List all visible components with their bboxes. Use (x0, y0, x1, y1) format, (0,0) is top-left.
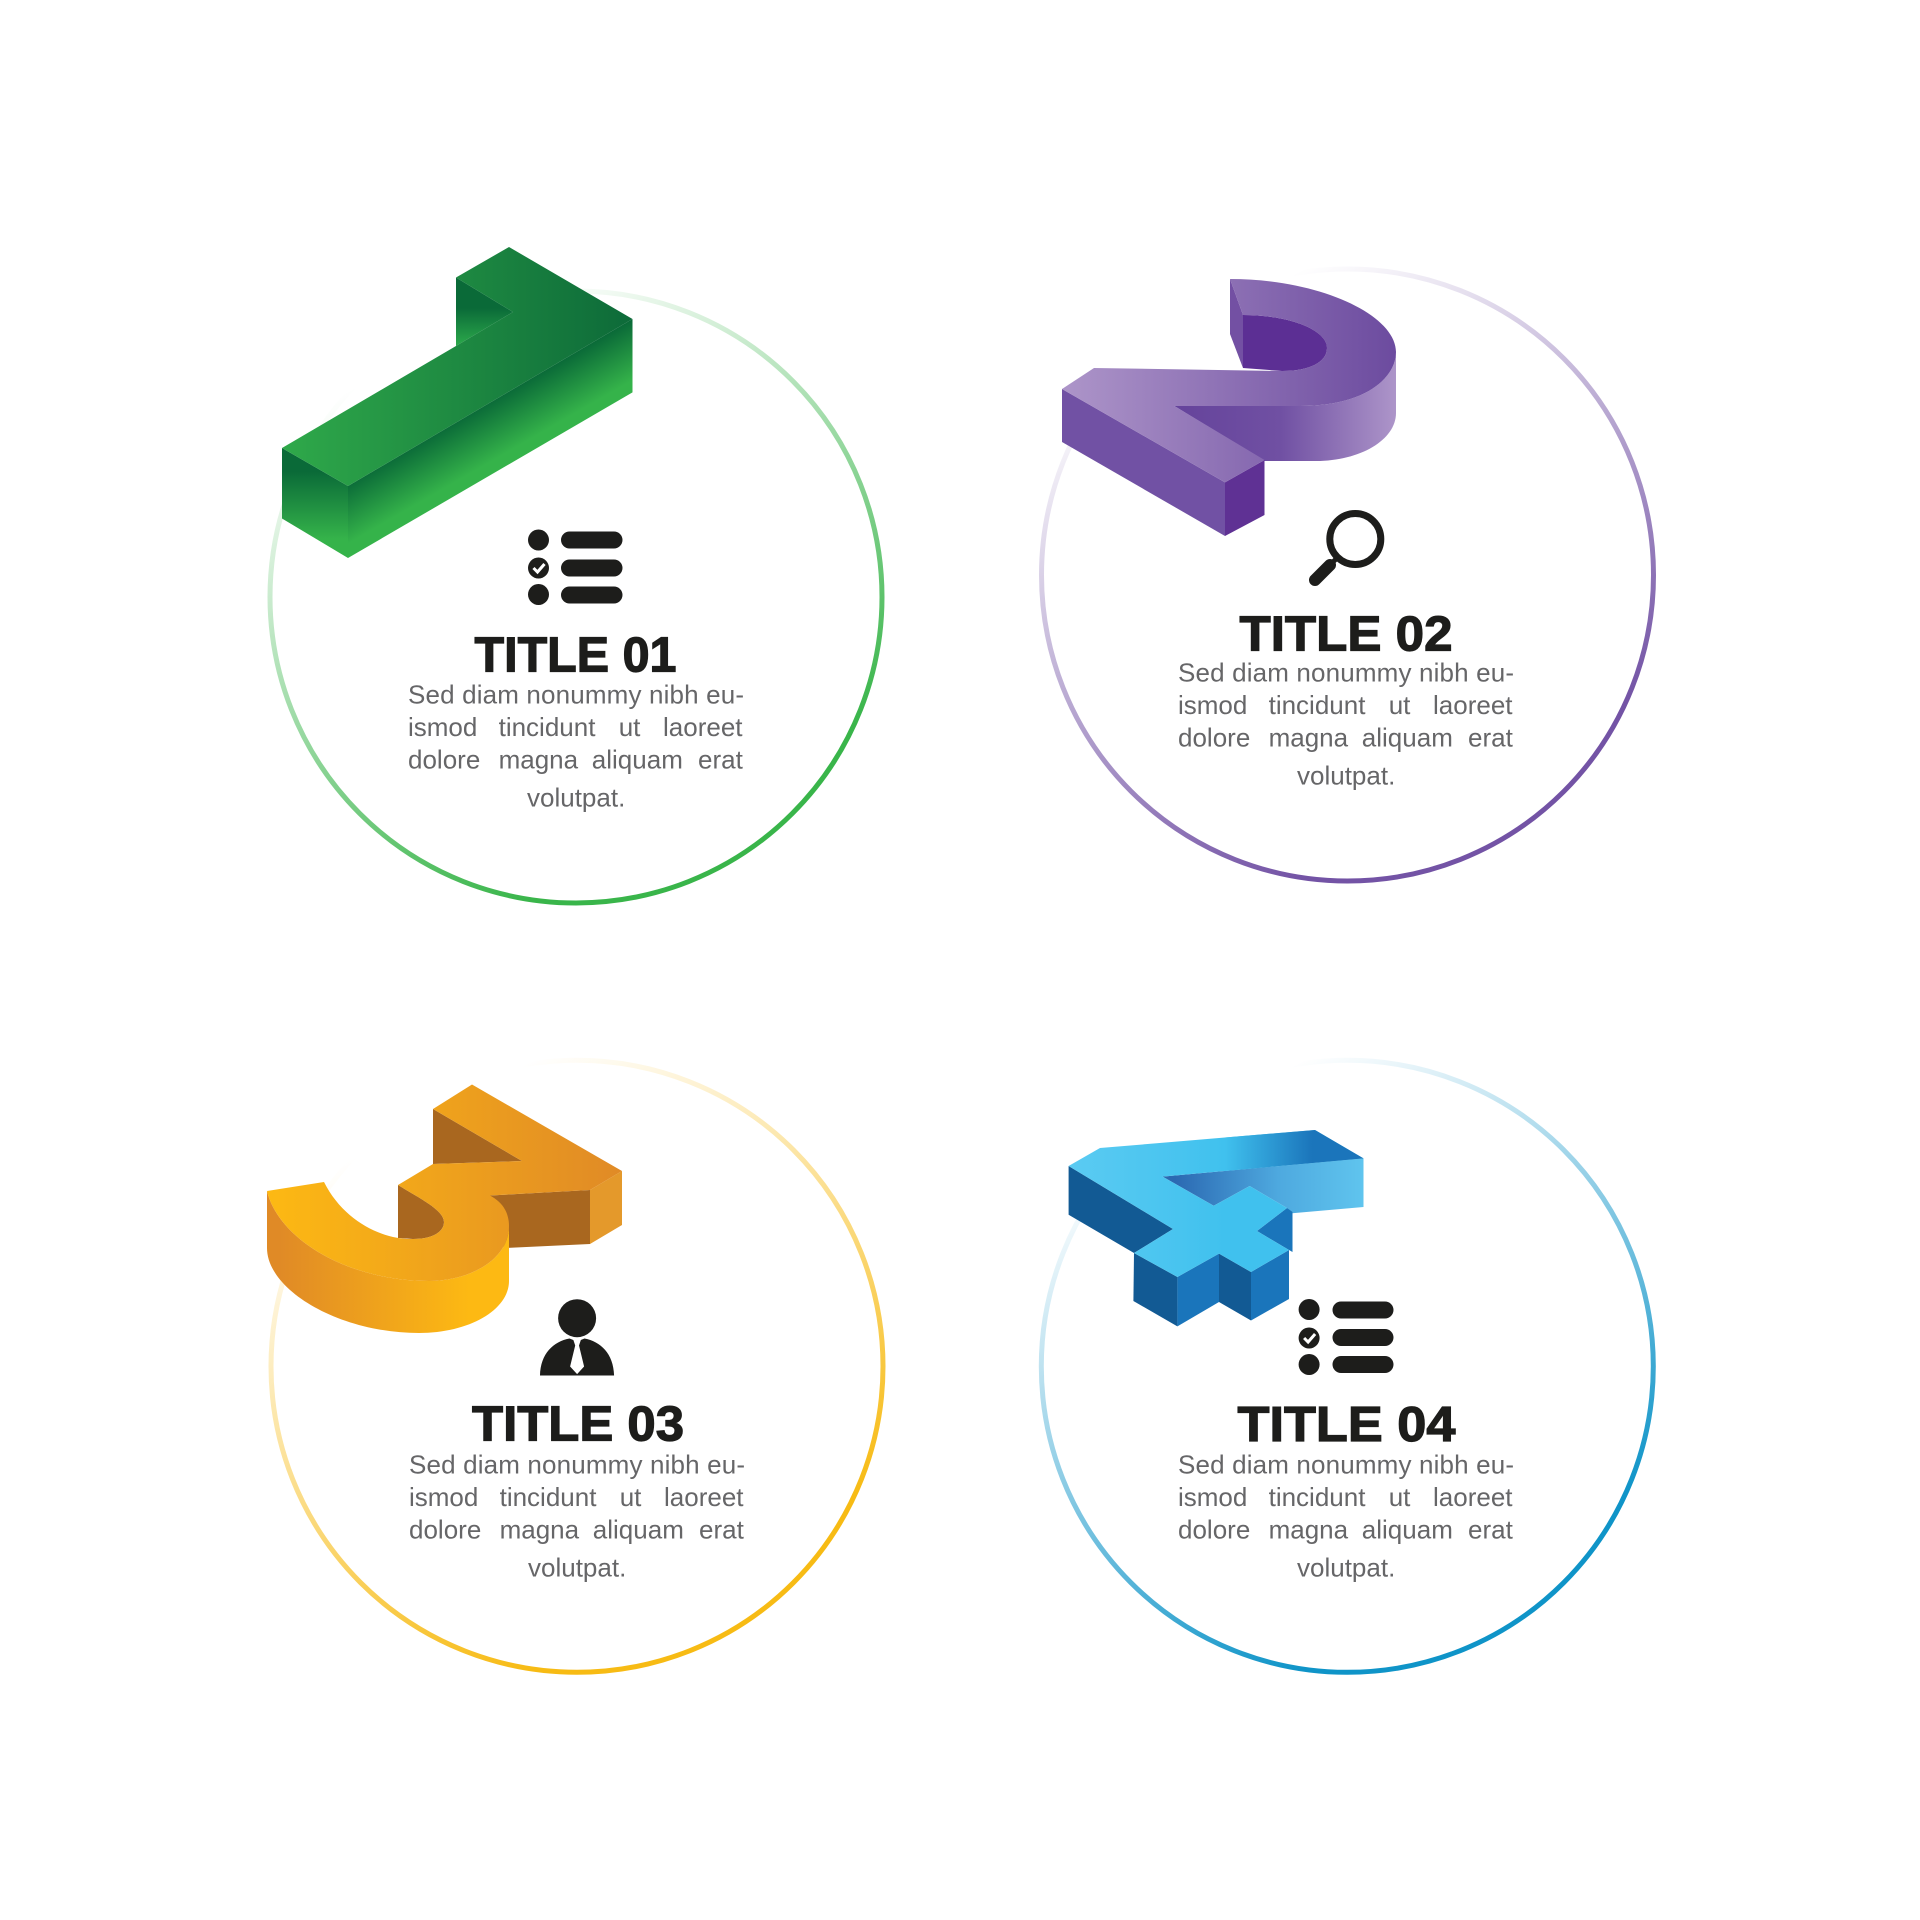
body text: dolore (409, 1514, 481, 1544)
body text: volutpat. (1297, 1552, 1395, 1582)
ring: yellow circle (271, 1060, 883, 1672)
body text: magna (1269, 722, 1349, 752)
numeral: 3D blue 4 (1069, 1130, 1364, 1326)
icon: magnifier (1315, 514, 1381, 580)
ring: green circle (270, 291, 882, 903)
body text: tincidunt (1269, 690, 1366, 720)
panel: card 3 (267, 1060, 883, 1672)
body text: erat (698, 744, 744, 774)
body text: dolore (1178, 722, 1250, 752)
title: TITLE 03 (472, 1398, 684, 1452)
body text: ut (1389, 1482, 1411, 1512)
title: TITLE 02 (1240, 608, 1452, 662)
panel: card 1 (270, 247, 882, 903)
ring: purple circle (1042, 269, 1654, 881)
body text: ut (619, 712, 641, 742)
ring: blue circle (1041, 1060, 1653, 1672)
body text: erat (699, 1514, 745, 1544)
icon: businessman (540, 1299, 614, 1376)
body text: dolore (408, 744, 480, 774)
body text: erat (1468, 1514, 1514, 1544)
body text: tincidunt (500, 1482, 597, 1512)
title: TITLE 04 (1238, 1398, 1456, 1452)
panel: card 2 (1042, 269, 1654, 881)
icon: checklist (1299, 1299, 1394, 1375)
body text: aliquam (593, 1514, 684, 1544)
body text: ut (1389, 690, 1411, 720)
body text: dolore (1178, 1514, 1250, 1544)
body text: Sed diam nonummy nibh eu- (1178, 658, 1514, 688)
body text: ismod (1178, 690, 1247, 720)
body text: tincidunt (499, 712, 596, 742)
numeral: 3D orange 3 (267, 1084, 622, 1333)
body text: laoreet (1433, 1482, 1513, 1512)
body text: volutpat. (1297, 760, 1395, 790)
body text: aliquam (1362, 1514, 1453, 1544)
body text: laoreet (664, 1482, 744, 1512)
body text: ismod (1178, 1482, 1247, 1512)
body text: aliquam (592, 744, 683, 774)
body text: laoreet (663, 712, 743, 742)
body text: erat (1468, 722, 1514, 752)
title: TITLE 01 (474, 628, 676, 682)
body text: magna (499, 744, 579, 774)
body text: Sed diam nonummy nibh eu- (1178, 1450, 1514, 1480)
body text: ismod (409, 1482, 478, 1512)
panel: card 4 (1041, 1060, 1653, 1672)
icon: checklist (528, 530, 622, 605)
numeral: 3D purple 2 (1062, 279, 1396, 536)
body text: Sed diam nonummy nibh eu- (409, 1450, 745, 1480)
body text: volutpat. (528, 1552, 626, 1582)
body text: laoreet (1433, 690, 1513, 720)
numeral: 3D green 1 (282, 247, 632, 558)
body text: ismod (408, 712, 477, 742)
body text: tincidunt (1269, 1482, 1366, 1512)
body text: magna (500, 1514, 580, 1544)
body text: aliquam (1362, 722, 1453, 752)
body text: magna (1269, 1514, 1349, 1544)
body text: Sed diam nonummy nibh eu- (408, 680, 744, 710)
body text: volutpat. (527, 782, 625, 812)
body text: ut (620, 1482, 642, 1512)
